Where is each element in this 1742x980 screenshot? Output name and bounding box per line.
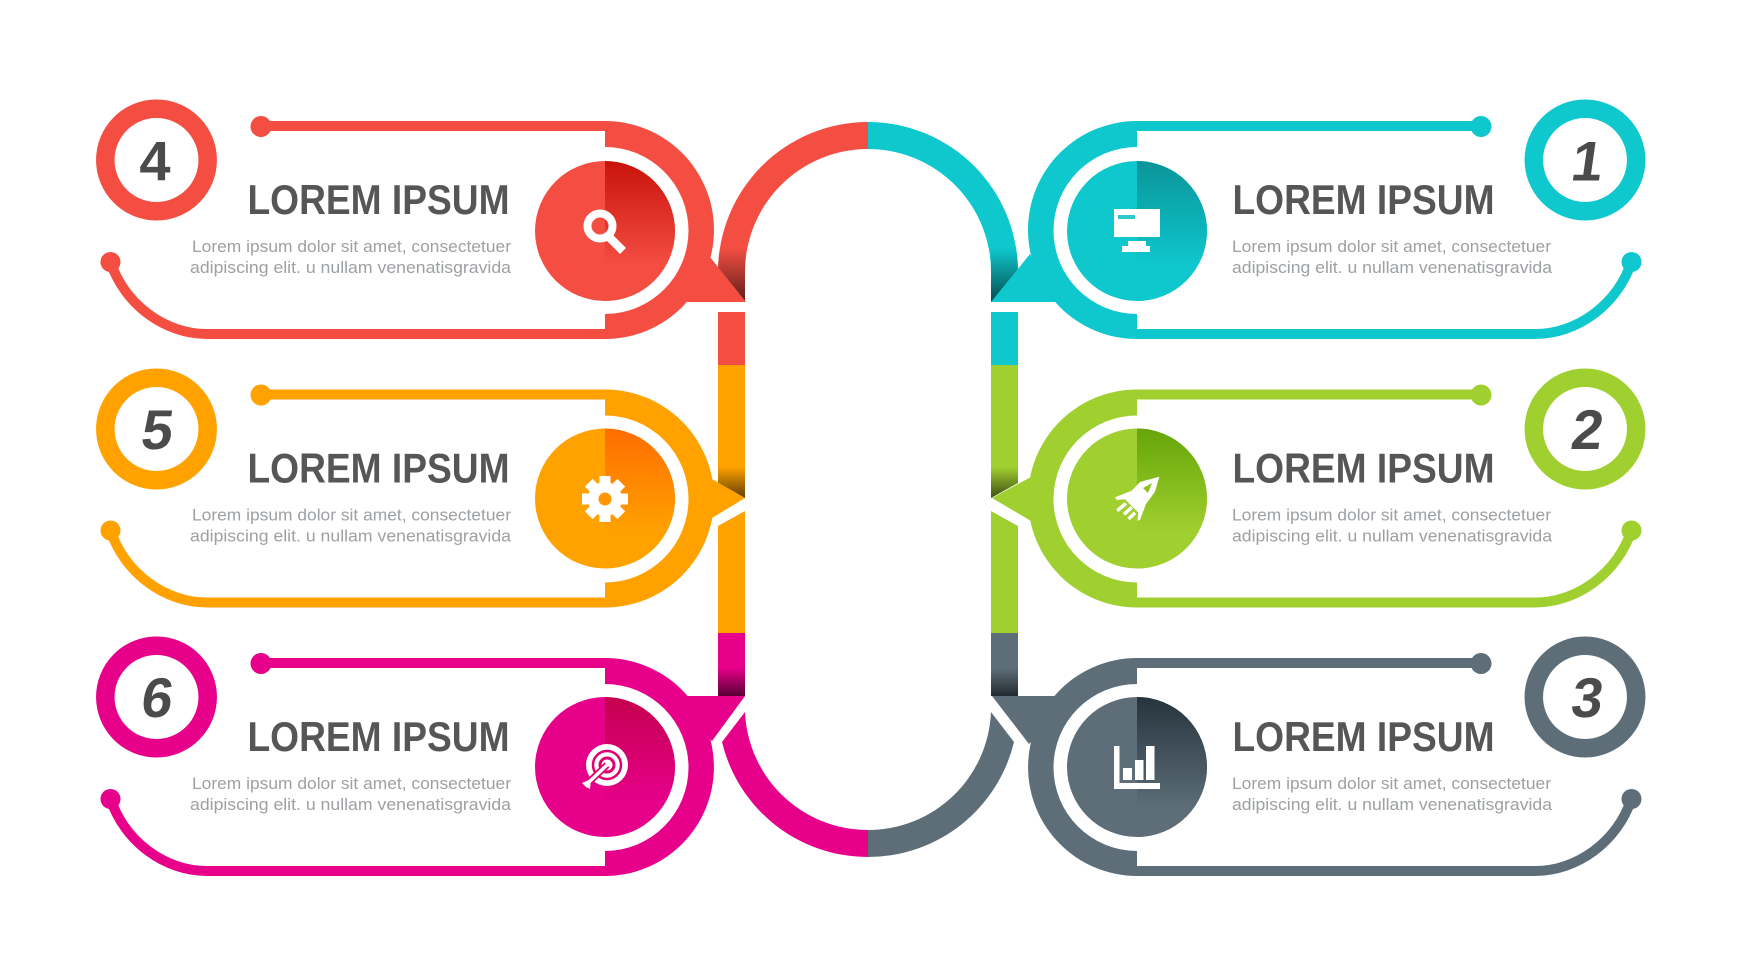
badge 6: 6 [138,666,178,729]
badge 4: 4 [139,130,171,192]
pointer [712,479,745,518]
bottom curved line with dot [100,252,605,334]
icon: target with arrow [582,744,628,789]
heading: LOREM IPSUM [248,176,510,223]
panel: step 6 [100,646,745,876]
badge 5: 5 [138,398,178,461]
top line with dot [250,653,605,674]
pointer [684,257,746,302]
body text: Lorem ipsum dolor sit amet, consectetuer [192,774,511,793]
body text [1232,506,1553,546]
body text: adipiscing elit. u nullam venenatisgravida [190,795,512,814]
capsule right teal segment [991,312,1018,365]
heading: LOREM IPSUM [1232,713,1494,760]
top line with dot [1137,384,1492,406]
capsule left magenta segment [718,633,745,696]
pointer [992,477,1031,521]
badge 1: 1 [1568,130,1608,192]
body text: Lorem ipsum dolor sit amet, consectetuer [192,506,511,524]
body text: Lorem ipsum dolor sit amet, consectetuer [1232,506,1551,524]
icon disc [1067,428,1207,568]
icon: bar chart [1114,746,1160,789]
heading: LOREM IPSUM [1232,444,1494,492]
badge 2 [1534,378,1636,480]
panel: step 3 [992,646,1642,876]
pointer [992,696,1056,744]
ring [1028,390,1137,608]
badge 3: 3 [1568,666,1608,729]
capsule bottom right arc [868,712,1014,857]
body text: Lorem ipsum dolor sit amet, consectetuer [1232,774,1551,793]
panel: step 5 [100,378,745,608]
capsule bottom left arc [722,712,868,857]
icon: rocket [1115,477,1159,521]
badge 1 [1534,109,1636,211]
icon disc [1067,161,1207,301]
body text [190,774,512,814]
body text [1232,237,1553,277]
ring [1028,121,1137,339]
top line with dot [250,116,605,137]
badge 3 [1534,646,1636,748]
icon: magnifier [588,214,623,251]
bottom curved line with dot [100,520,605,602]
icon disc [535,428,675,568]
ring [605,658,714,876]
bottom curved line with dot [1137,789,1642,871]
body text: Lorem ipsum dolor sit amet, consectetuer [192,237,511,256]
capsule right slate segment [991,633,1018,696]
top line with dot [1137,653,1492,674]
pointer [687,696,745,741]
body text: adipiscing elit. u nullam venenatisgravida [1232,526,1553,546]
top line with dot [1137,116,1492,137]
panel: step 1 [991,109,1642,339]
ring [605,121,714,339]
body text: adipiscing elit. u nullam venenatisgravida [190,526,512,546]
pointer [991,254,1057,302]
body text: adipiscing elit. u nullam venenatisgravida [190,258,512,277]
heading: LOREM IPSUM [248,713,510,760]
panel: step 2 [992,378,1642,608]
bottom curved line with dot [1137,252,1642,334]
bottom curved line with dot [1137,520,1642,602]
ring [605,390,714,608]
body text: Lorem ipsum dolor sit amet, consectetuer [1232,237,1551,256]
capsule top left arc [718,122,868,302]
body text [190,506,512,546]
top line with dot [250,384,605,406]
body text [1232,774,1553,814]
panel: step 4 [100,109,746,339]
badge 5 [105,378,208,480]
icon: monitor [1114,209,1160,252]
capsule left orange segment [718,365,745,633]
heading: LOREM IPSUM [248,444,510,492]
badge 6 [105,646,208,748]
body text: adipiscing elit. u nullam venenatisgravida [1232,258,1553,277]
badge 2: 2 [1568,398,1608,461]
heading: LOREM IPSUM [1232,176,1494,223]
badge 4 [105,109,208,211]
capsule right green segment [991,365,1018,633]
central capsule [718,122,1018,857]
icon disc [1067,697,1207,837]
bottom curved line with dot [100,789,605,871]
icon disc [535,697,675,837]
icon: gear [582,476,628,522]
capsule top right arc [868,122,1018,302]
body text: adipiscing elit. u nullam venenatisgravida [1232,795,1553,814]
body text [190,237,512,277]
capsule left red segment [718,312,745,365]
icon disc [535,161,675,301]
ring [1028,658,1137,876]
